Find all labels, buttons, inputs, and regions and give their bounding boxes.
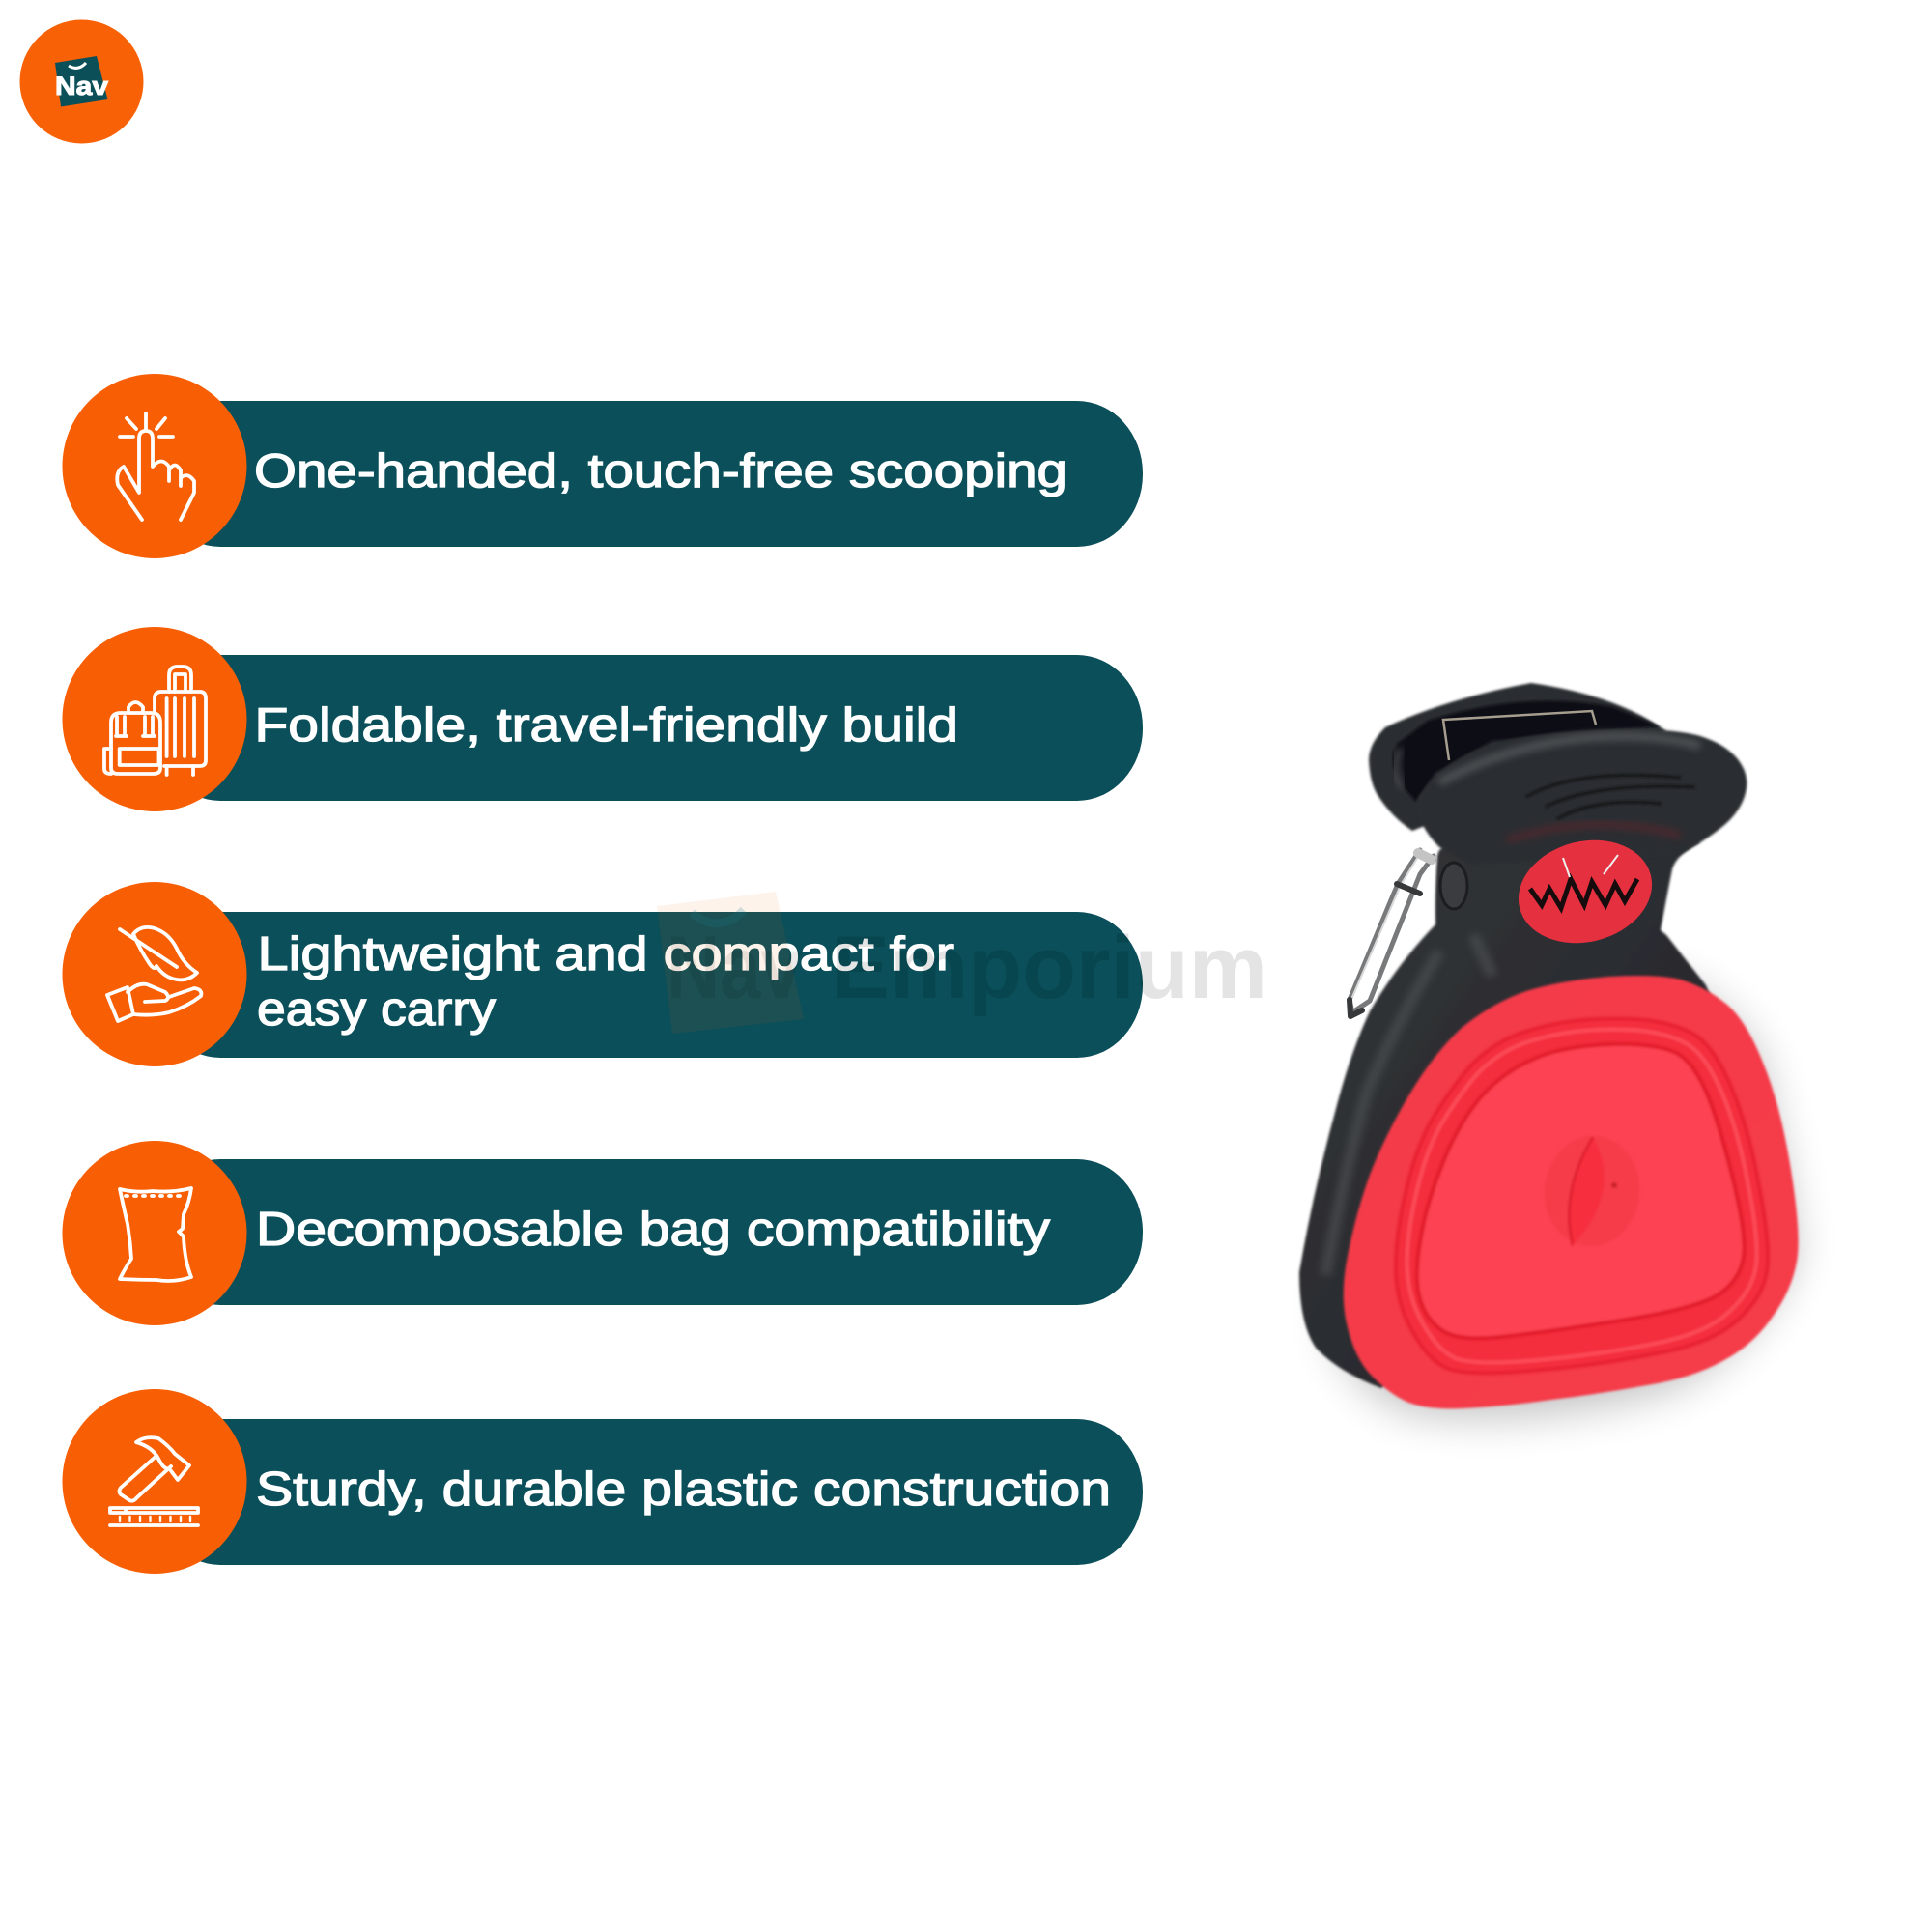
inner ridge highlight: [1407, 1030, 1757, 1363]
handle: [1416, 729, 1747, 865]
icon: hammer and board: [110, 1437, 198, 1525]
product: folding scooper: [1299, 683, 1799, 1417]
feature row 1: One-handed, touch-free scooping: [254, 445, 1067, 497]
feature row 5: Sturdy, durable plastic construction: [256, 1463, 1111, 1516]
feature row 3: easy carry: [257, 983, 497, 1036]
feature row 3: Lightweight and compact for: [257, 928, 954, 980]
soft shadow: [1331, 979, 1796, 1417]
logo badge: Nav: [55, 71, 108, 100]
feature row 5: [62, 1389, 1143, 1574]
feature row 4: Decomposable bag compatibility: [256, 1204, 1051, 1256]
feature row 3: [62, 882, 1143, 1066]
watermark: Nav: [667, 919, 802, 1017]
red centre panel: [1417, 1044, 1745, 1338]
feature row 4: [62, 1141, 1143, 1325]
red lid outer: [1344, 976, 1799, 1408]
feature row 1: [62, 374, 1143, 558]
pivot: [1440, 863, 1467, 909]
watermark: [657, 892, 1267, 1034]
icon: feather over hand: [107, 927, 201, 1021]
body highlight: [1325, 935, 1492, 1275]
lid back: [1369, 683, 1666, 831]
watermark: Emporium: [831, 919, 1267, 1017]
feature row 2: Foldable, travel-friendly build: [255, 699, 958, 752]
red ring: [1396, 1018, 1768, 1373]
panel knob: [1539, 1131, 1645, 1251]
icon: tapping hand: [117, 413, 194, 520]
logo badge: [19, 19, 143, 143]
icon: bag: [120, 1188, 191, 1281]
feature row 2: [62, 627, 1143, 811]
black body: [1299, 773, 1739, 1388]
logo oval: [1507, 827, 1663, 956]
icon: luggage: [104, 667, 206, 775]
carabiner clip: [1350, 850, 1434, 1016]
